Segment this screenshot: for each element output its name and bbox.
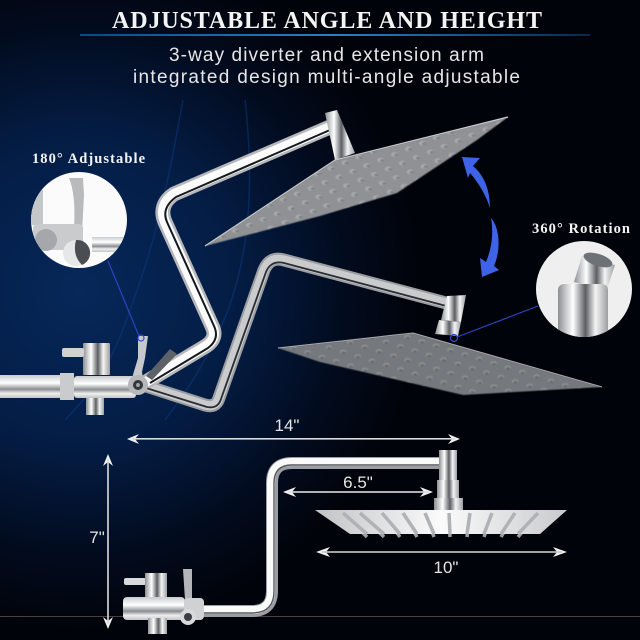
dimension: 7 inch: 7": [89, 528, 105, 547]
subtitle: 3-way diverter and extension arm: [169, 45, 484, 66]
dimension: 14 inch: [127, 416, 460, 444]
dimension: 6.5 inch: 6.5": [343, 473, 373, 492]
callout: 360° rotation: [450, 221, 632, 342]
callout: 180° adjustable: [31, 151, 146, 341]
diverter valve: [0, 336, 177, 415]
rotation arrow: up: [462, 157, 490, 208]
dimension: 6.5 inch: [283, 473, 433, 497]
lower shower head: [278, 295, 602, 395]
dimension: 14 inch: 14": [275, 416, 299, 435]
subtitle: [133, 45, 520, 88]
upper shower arm: [146, 127, 330, 383]
callout: 360° rotation: 360° Rotation: [532, 221, 630, 237]
title: ADJUSTABLE ANGLE AND HEIGHT: [112, 8, 542, 34]
dimension: 10 inch: 10": [434, 558, 458, 577]
upper shower head: [205, 110, 508, 246]
callout: 180° adjustable: 180° Adjustable: [32, 151, 146, 167]
dimension: 10 inch: [316, 547, 567, 577]
floor line: [0, 616, 640, 617]
subtitle: integrated design multi-angle adjustable: [133, 67, 520, 88]
dimension: 7 inch: [89, 454, 113, 629]
lower shower arm: [146, 259, 450, 407]
rotation arrow: down: [480, 218, 499, 277]
product side view: [123, 450, 567, 634]
